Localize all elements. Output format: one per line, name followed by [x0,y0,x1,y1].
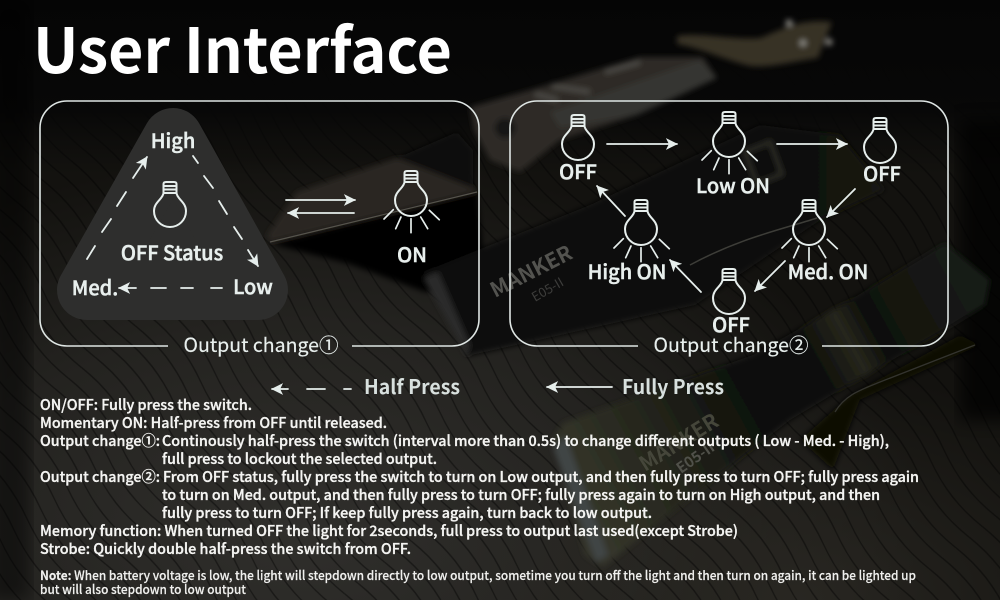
instructions text: Momentary ON: Half-press from OFF until released. [40,412,387,433]
icon: bulb on [384,171,439,233]
caption: output change 1: Output change① [184,329,338,358]
flashlight 2 [553,243,990,567]
panel: output change 2 [510,101,948,346]
flashlight clip arc [690,218,817,265]
step: low on [696,112,770,199]
arrow: to off [288,212,354,214]
label: Med.: Med. [72,272,118,301]
instructions text: Strobe: Quickly double half-press the switch from OFF. [40,538,411,559]
dashed arrow: high to low [193,156,258,266]
triangle status area [87,138,258,290]
step: off 3 [712,269,750,338]
background photo: fabric, knife and flashlights: E05-II [672,437,719,478]
arrow: off to low [607,143,677,145]
step: med on: Med. ON [788,256,868,285]
arrow: off to med [827,189,855,217]
note text: but will also stepdown to low output [40,579,246,598]
instructions text: to turn on Med. output, and then fully press to turn OFF; fully press again to turn on High output, and then [162,484,880,505]
background photo: fabric, knife and flashlights: MANKER [633,405,724,478]
arrow: off to high [670,260,701,292]
arrow: low to off [777,143,847,145]
knife handle [470,57,717,172]
step: high on [588,200,669,285]
flashlight clip [800,335,980,470]
instructions text: full press to lockout the selected output. [162,448,437,469]
step: off 1 [559,115,597,185]
instructions text: Memory function: When turned OFF the light for 2seconds, full press to output last used(except Strobe) [40,520,738,541]
label: Low: Low [233,271,273,300]
note text [40,565,916,598]
instructions text [40,394,919,559]
instructions text: Output change②: [40,466,160,487]
paracord keychain [677,20,832,66]
arrow: to on [286,199,355,201]
knife blade and shadow [267,132,486,292]
step: med on [782,200,868,285]
step: off 1: OFF [559,156,597,185]
step: off 3: OFF [712,309,750,338]
knife blade edge [270,192,477,242]
instructions text: From OFF status, fully press the switch to turn on Low output, and then fully press to turn OFF; fully press again [163,466,919,487]
title: User Interface [33,1,452,91]
arrow: med to off [755,261,785,291]
label: ON: ON [397,239,427,268]
instructions text: Continously half-press the switch (interval more than 0.5s) to change different outputs ( Low - Med. - High), [162,430,889,451]
dashed arrow: medium to high [87,157,147,259]
panel: output change 1 [40,101,479,346]
instructions text: fully press to turn OFF; If keep fully press again, turn back to low output. [162,502,652,523]
label: OFF Status: OFF Status [121,237,223,266]
legend: half press: Half Press [364,371,460,400]
instructions text: Output change①: [40,430,160,451]
flashlight 1 [423,125,885,356]
step: off 2: OFF [863,158,901,187]
legend: fully press: Fully Press [622,371,724,400]
arrow: high to off [597,186,625,216]
step: low on: Low ON [696,170,770,199]
caption: output change 2: Output change② [654,329,808,358]
flashlight brand text: MANKER [485,237,577,304]
background photo: fabric, knife and flashlights: E05-II [528,272,567,305]
note text: Note: When battery voltage is low, the light will stepdown directly to low output, sometime you turn off the light and then turn on again, it can be lighted up [40,565,916,584]
instructions text: ON/OFF: Fully press the switch. [40,394,252,415]
dashed arrow: low to medium [119,287,222,289]
icon: bulb off status [154,182,186,227]
step: high on: High ON [588,256,666,285]
label: High: High [151,125,195,154]
step: off 2 [863,118,901,187]
